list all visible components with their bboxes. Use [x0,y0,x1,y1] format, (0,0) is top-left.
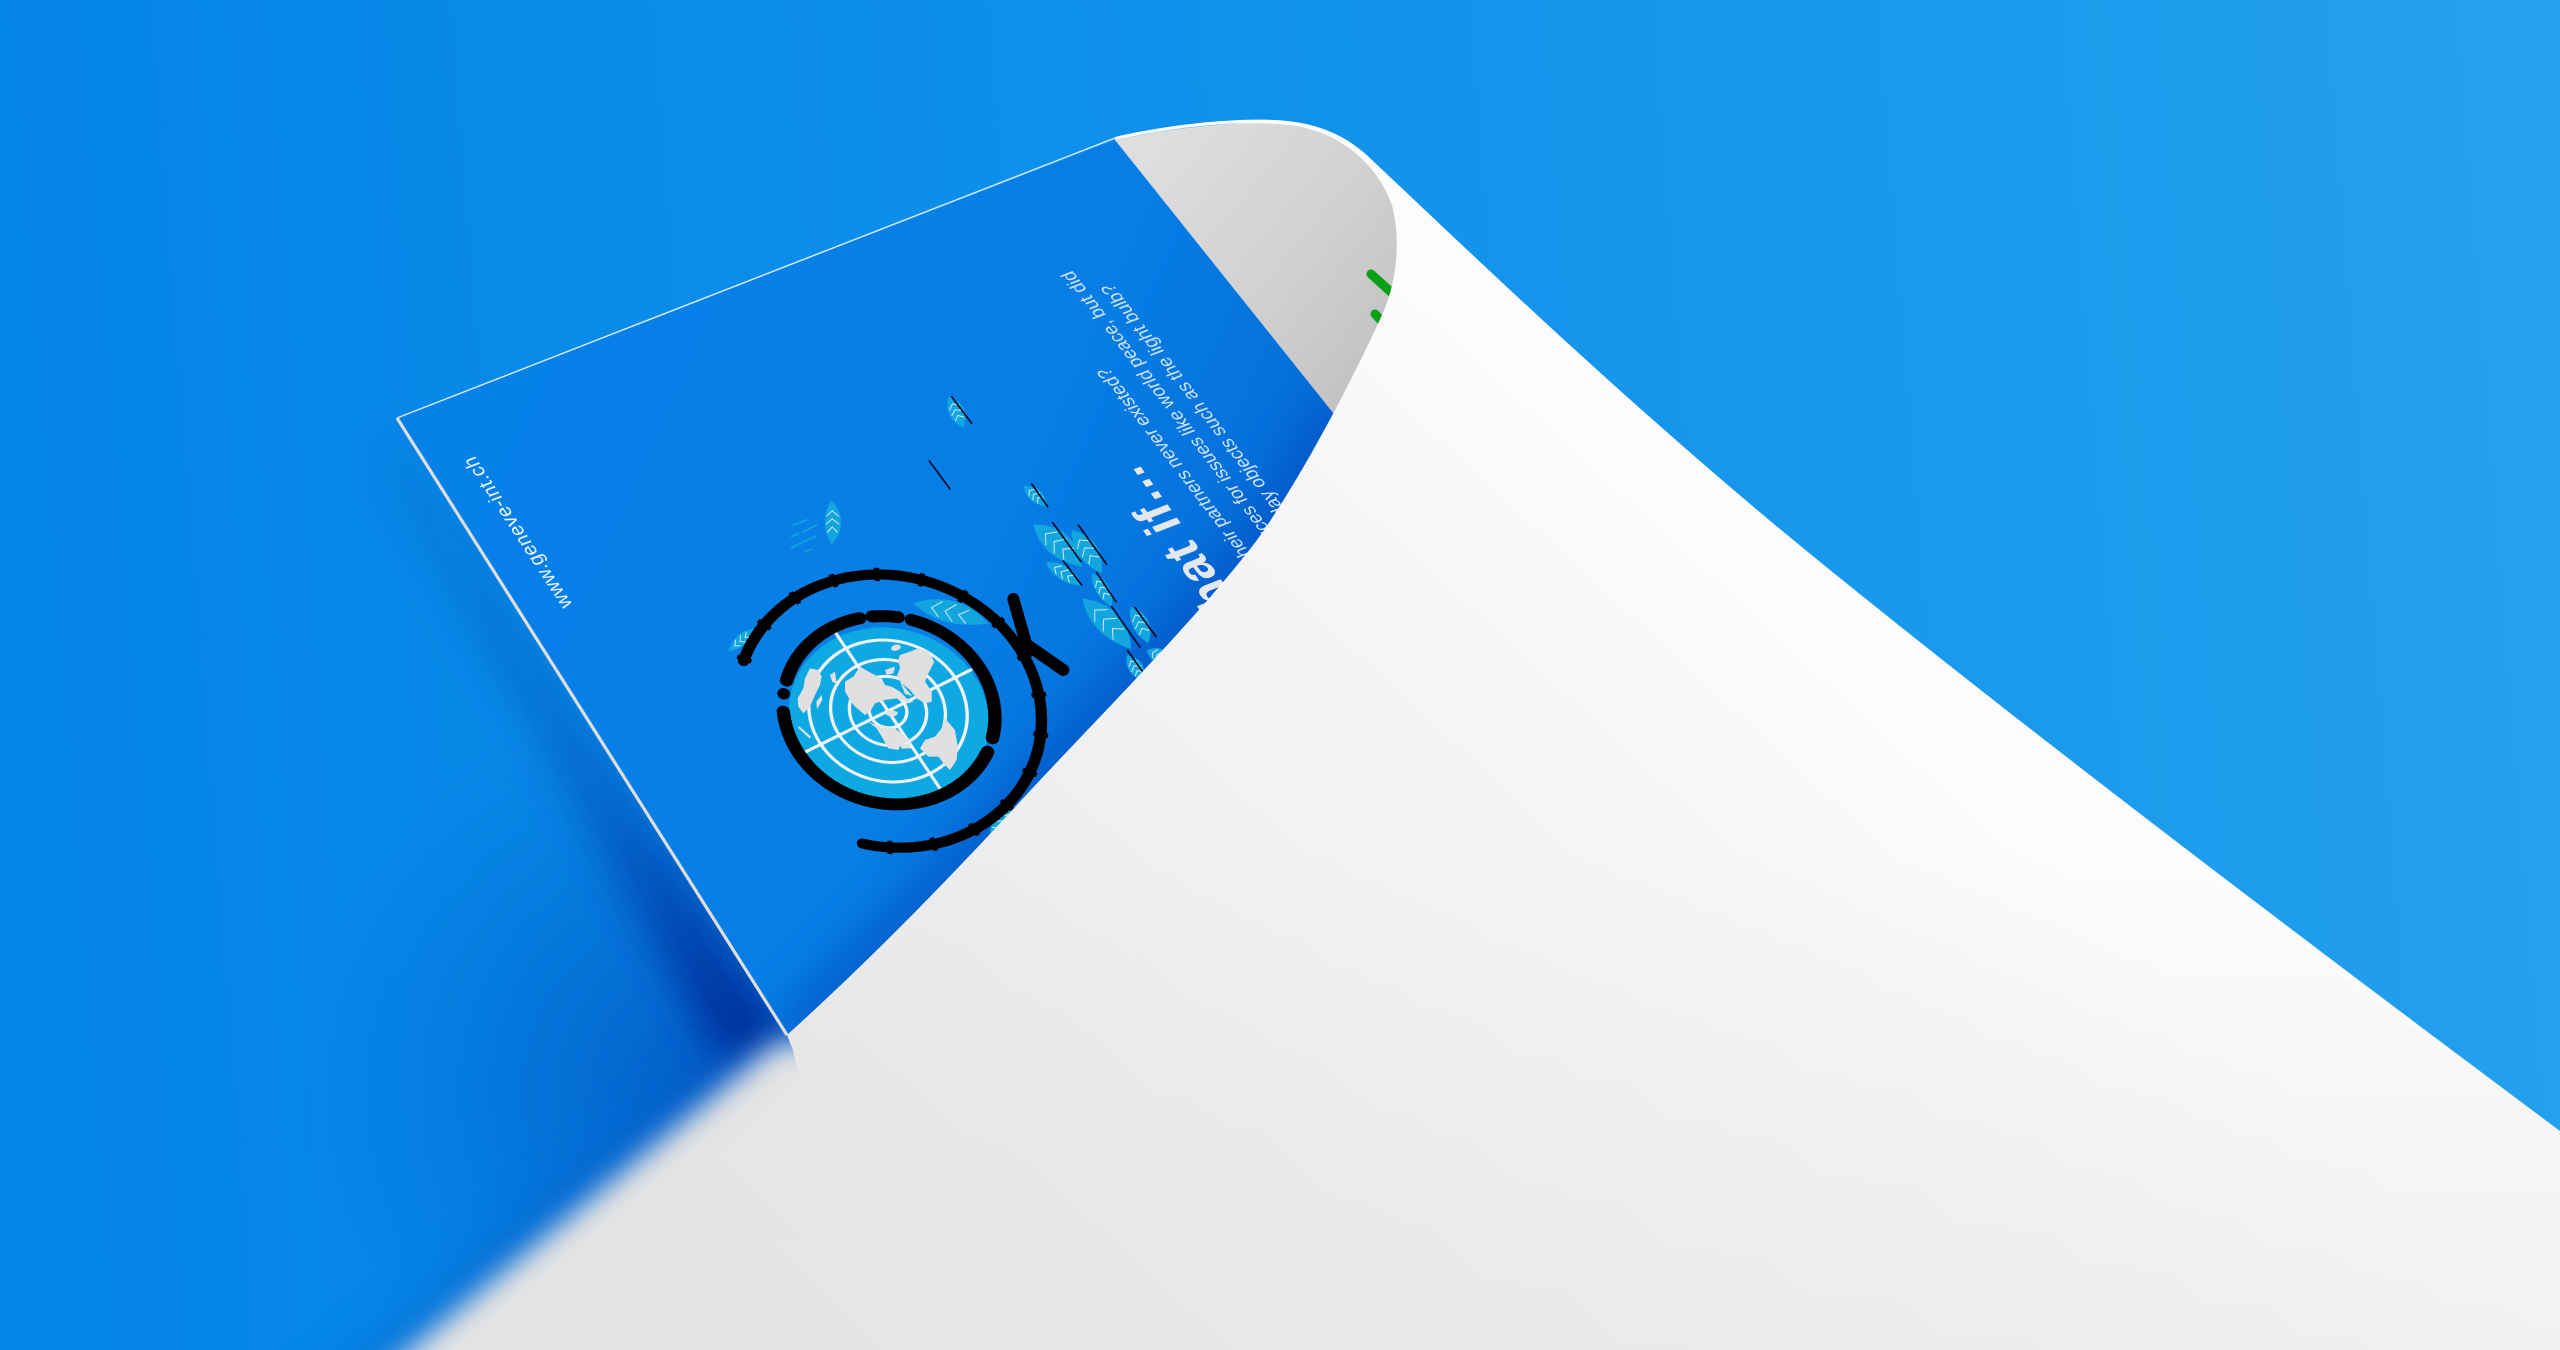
emblem inner black ring [744,583,1034,838]
body line 3: everyday objects such as the light bulb? [1097,281,1321,556]
leaf [1065,524,1111,578]
paper underside [1115,123,1413,430]
green marks on underside [1371,274,1392,332]
leaf [1042,555,1086,591]
poster top edge highlight [397,138,1115,418]
leaf [911,591,992,632]
leaf [1075,589,1142,657]
emblem disc [751,596,1027,838]
shadow of poster left edge [380,425,790,1060]
website url: www.geneve-int.ch [459,454,578,612]
leaf [1087,569,1118,610]
globe emblem [722,526,1099,875]
emblem crossing strokes [1013,599,1063,670]
leaf [1122,651,1150,685]
curl shadow on poster [787,405,1340,1035]
sheet lower shading [480,850,2560,1350]
emblem latitude rings and meridians [752,591,1024,831]
leaf stripes [792,520,817,552]
leaf [1124,602,1157,646]
emblem continents [798,643,958,770]
leaf [825,500,841,545]
leaf [1027,514,1091,574]
body text [1057,268,1321,577]
leaf decorations [724,393,1174,846]
leaf [983,802,1021,846]
blurred foreground sheet edge [230,1043,1100,1350]
leaf [724,623,760,655]
body line 2: resources for issues like world peace, but did [1057,268,1307,577]
poster [397,138,1345,1100]
black slits [929,397,1156,675]
poster left edge highlight [397,418,787,1035]
leaf [1144,643,1174,669]
leaf [942,393,971,431]
leaf [1020,480,1052,511]
body line 1: their partners never existed? [1093,365,1259,564]
shadow along blurred sheet edge [230,1010,830,1350]
shadow pool under the paper curl [250,650,890,1350]
poster sheet [397,140,1345,1100]
foreground white sheet with curl [480,120,2560,1350]
emblem outer black ring [722,526,1099,875]
heading: What if... [1096,459,1275,657]
